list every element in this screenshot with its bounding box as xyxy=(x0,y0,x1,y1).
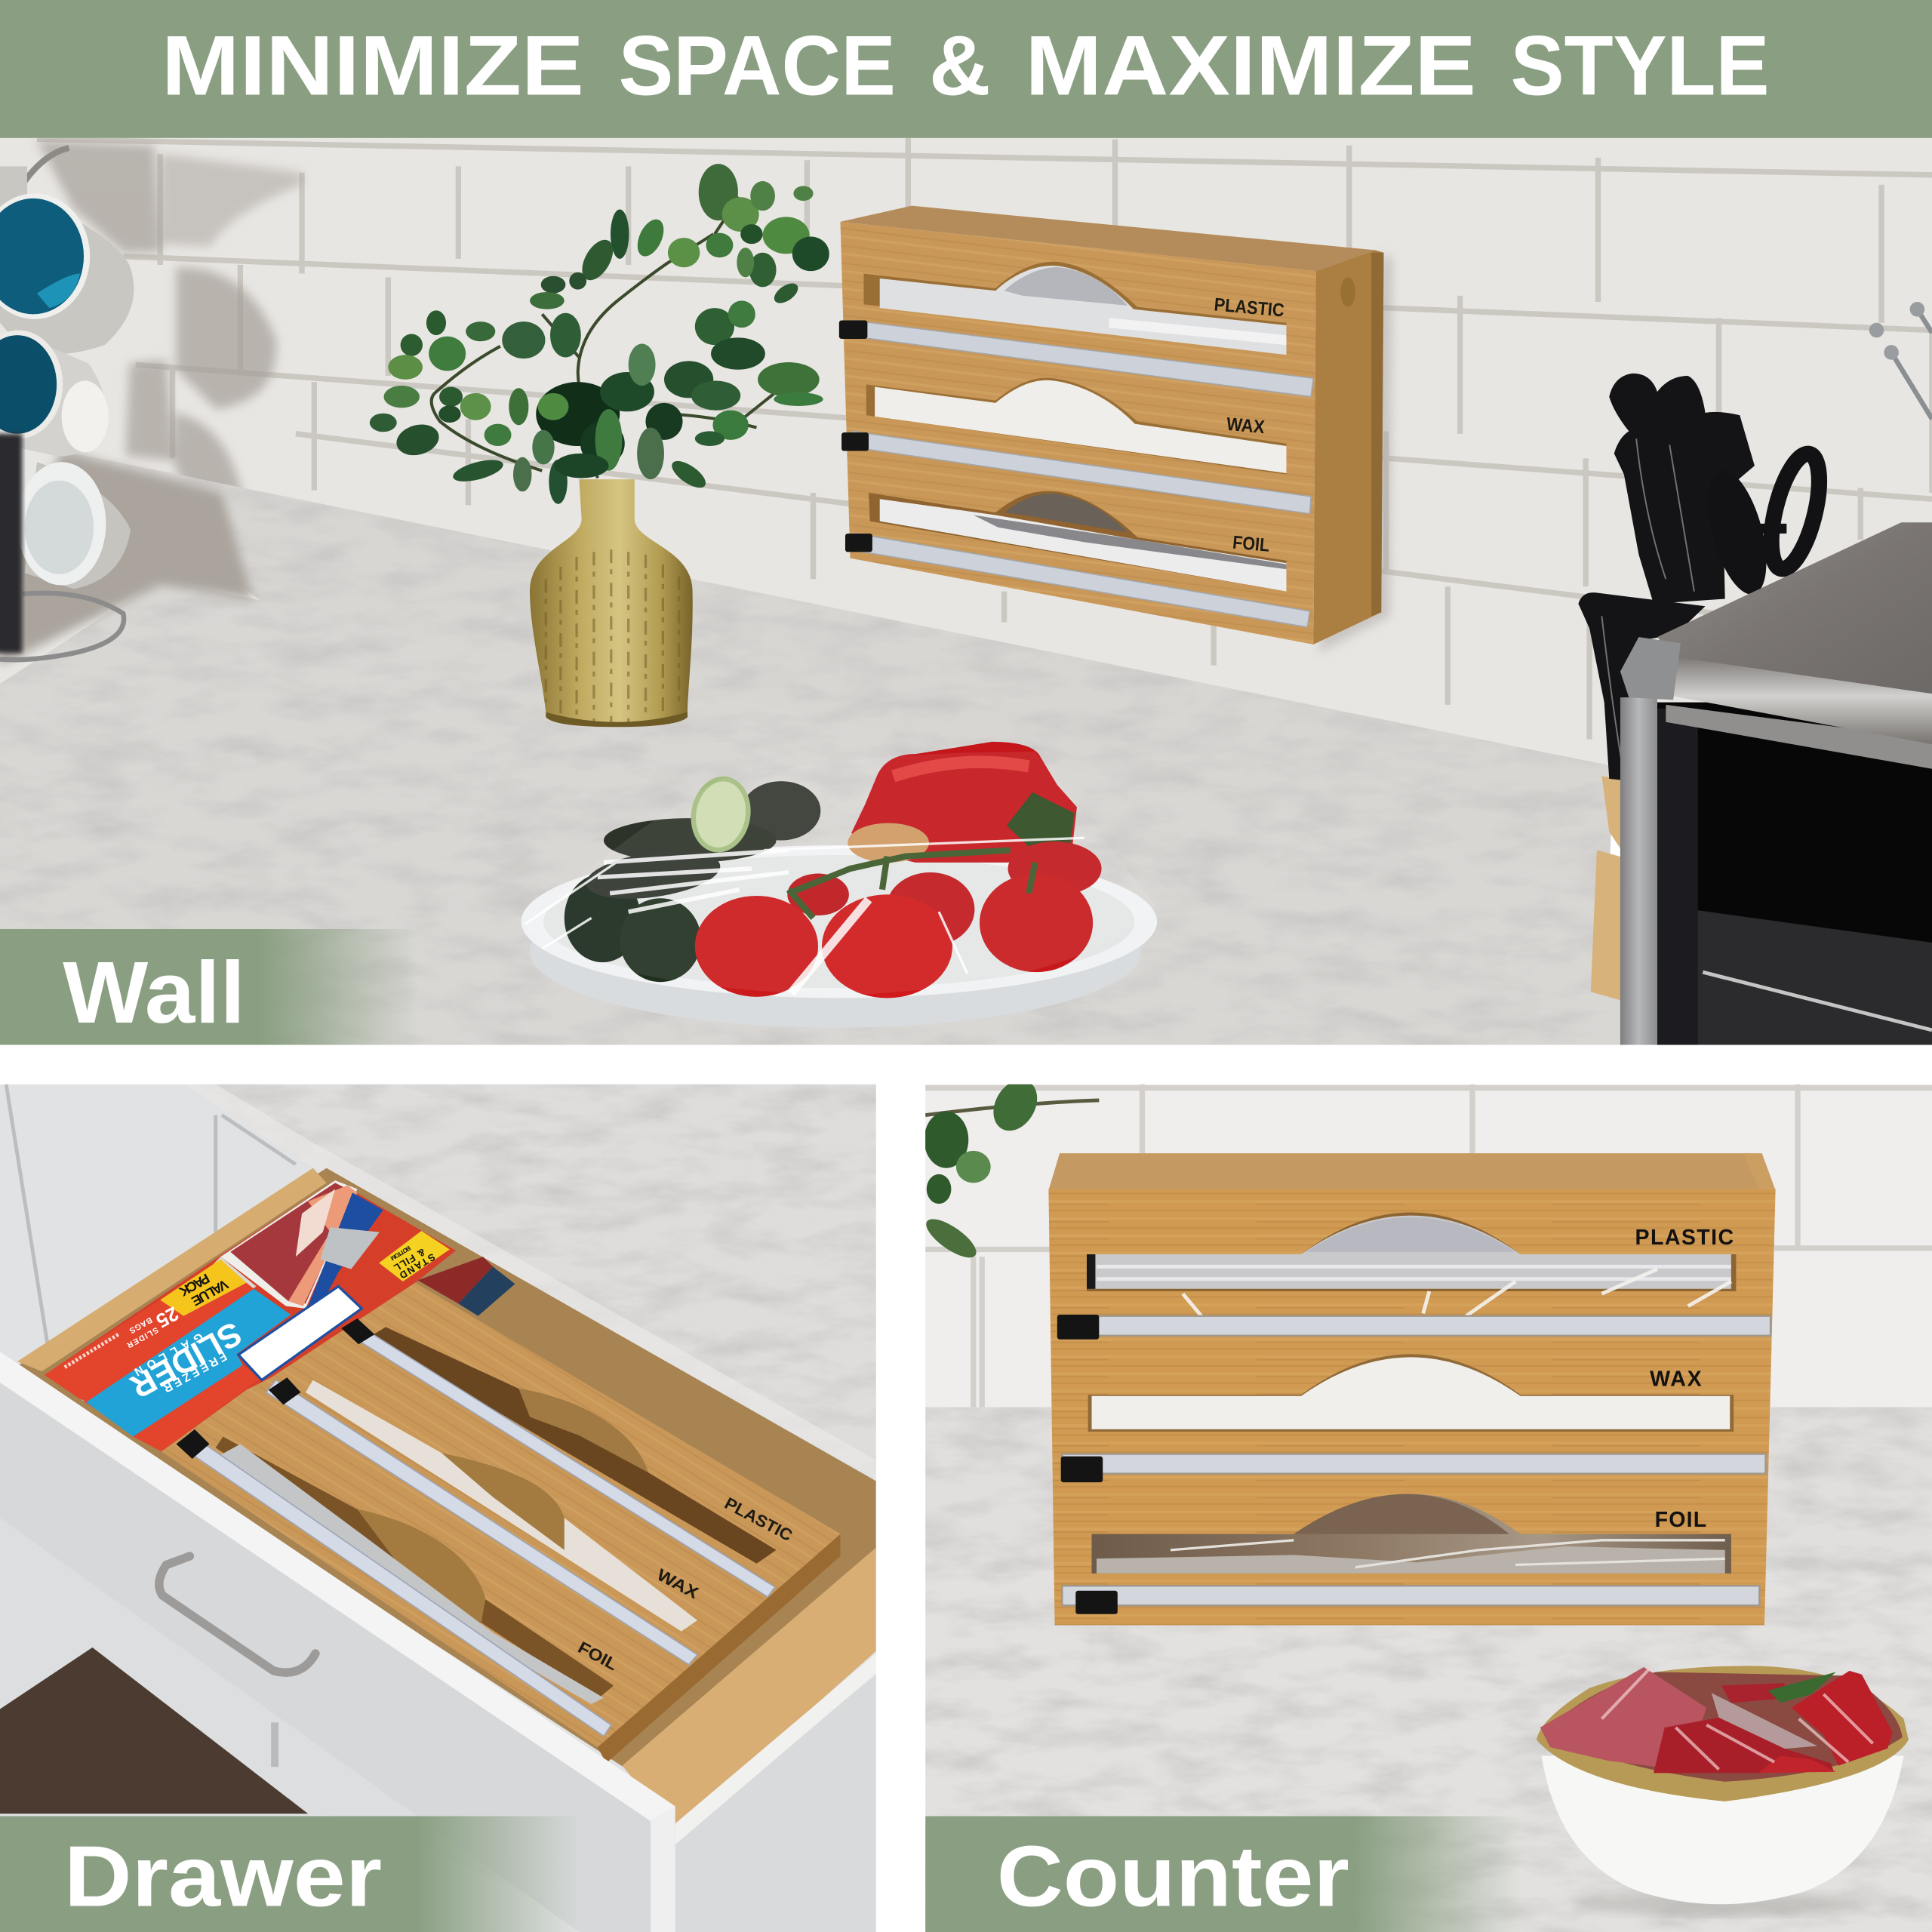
yellow value badge xyxy=(160,1260,247,1316)
wall shadow xyxy=(1318,253,1392,653)
cabinet door lines xyxy=(6,1084,296,1355)
hook xyxy=(22,148,69,185)
lower cabinet handle xyxy=(271,1722,278,1767)
zipper slider xyxy=(320,1227,380,1269)
bowl body xyxy=(1541,1756,1903,1904)
box print: PACK: PACK xyxy=(177,1271,212,1300)
drawer lower side xyxy=(675,1675,876,1932)
mug shadows on wall xyxy=(35,138,305,488)
panel: wall mounted scene xyxy=(0,138,1932,1044)
title: STYLE xyxy=(1511,18,1769,113)
label: FOIL: FOIL xyxy=(1232,533,1270,556)
box print: SLIDER: SLIDER xyxy=(124,1314,248,1405)
strawberries xyxy=(1540,1667,1893,1773)
wall tiles xyxy=(925,1084,1932,1417)
title: MINIMIZE xyxy=(162,18,584,113)
red box face xyxy=(45,1180,456,1451)
plate underside xyxy=(530,875,1141,1028)
white label xyxy=(238,1286,361,1380)
rack rod xyxy=(1703,972,1932,1030)
mug middle xyxy=(0,331,109,456)
mug top xyxy=(0,166,134,355)
plastic wrap opening xyxy=(1087,1213,1736,1316)
plastic slot xyxy=(370,1327,777,1564)
corner block xyxy=(1620,637,1681,700)
red panel lower xyxy=(133,1365,260,1451)
marble countertop xyxy=(925,1571,1932,1932)
banner: Wall xyxy=(0,929,419,1044)
plastic wrap opening xyxy=(863,262,1286,355)
top face xyxy=(1048,1153,1776,1190)
box print: STAND: STAND xyxy=(398,1251,437,1281)
panel: drawer scene xyxy=(0,1084,876,1932)
marble backsplash lip xyxy=(62,451,1614,900)
toaster oven xyxy=(1620,522,1932,1044)
foil opening xyxy=(869,491,1286,592)
title: MAXIMIZE xyxy=(1025,18,1476,113)
lower cabinet xyxy=(0,1518,592,1922)
wax paper opening xyxy=(866,378,1286,475)
top face xyxy=(840,206,1375,271)
slider clips xyxy=(839,320,872,552)
marble backsplash xyxy=(925,1407,1932,1574)
marble countertop xyxy=(185,1084,876,1478)
box print: FREEZER: FREEZER xyxy=(161,1349,229,1395)
dark blurred object xyxy=(0,434,22,653)
box print: GALLON: GALLON xyxy=(132,1330,205,1378)
main body xyxy=(162,1283,840,1747)
label: FOIL: FOIL xyxy=(575,1638,620,1674)
leaves xyxy=(370,164,829,504)
foil slot xyxy=(216,1437,614,1699)
drawer interior xyxy=(18,1168,876,1774)
second box xyxy=(417,1257,515,1316)
banner: Counter xyxy=(925,1817,1521,1932)
bowl inside xyxy=(1548,1672,1903,1782)
plant sprig xyxy=(921,1072,1099,1264)
pepper stem xyxy=(1007,792,1075,853)
plant xyxy=(370,164,829,504)
banner label: Wall xyxy=(63,943,245,1041)
counter dispenser xyxy=(1048,1153,1776,1625)
plastic highlights xyxy=(1601,1667,1873,1769)
marble countertop xyxy=(0,579,1626,1044)
side depth xyxy=(598,1534,840,1763)
label: WAX: WAX xyxy=(654,1565,702,1603)
handle tube xyxy=(1673,657,1932,744)
banner label: Drawer xyxy=(64,1829,382,1925)
banner label: Counter xyxy=(997,1829,1349,1925)
lower knife handles xyxy=(1578,592,1706,781)
cutter bars xyxy=(853,320,1313,627)
wire stand xyxy=(0,593,124,660)
floor xyxy=(0,1647,309,1814)
meat window xyxy=(220,1180,357,1309)
wooden block xyxy=(1591,777,1626,1001)
title banner xyxy=(0,0,1932,138)
plate rim xyxy=(521,845,1157,998)
steel rods at right xyxy=(1869,302,1932,419)
stems xyxy=(432,197,789,478)
steel strip under tube xyxy=(1666,705,1932,769)
label: PLASTIC: PLASTIC xyxy=(1214,295,1285,321)
plate with wrapped vegetables xyxy=(521,742,1157,1028)
box print: BAGS: BAGS xyxy=(128,1315,154,1335)
red band xyxy=(45,1283,254,1402)
slider clips xyxy=(1057,1315,1118,1614)
wall dispenser xyxy=(839,206,1392,653)
front face xyxy=(840,222,1316,645)
box print: SLIDER BAGS: SLIDER xyxy=(125,1325,160,1350)
panel: counter scene xyxy=(921,1072,1932,1932)
highlight stripes xyxy=(1601,438,1694,777)
top plate xyxy=(1657,522,1932,696)
blue panel xyxy=(86,1289,291,1437)
pine drawer side xyxy=(622,1548,876,1829)
mug bottom xyxy=(17,462,131,589)
rear edge xyxy=(1371,253,1383,616)
bowl of strawberries xyxy=(1537,1666,1909,1916)
slider clips xyxy=(176,1318,374,1459)
label: PLASTIC: PLASTIC xyxy=(721,1494,795,1545)
drawer front xyxy=(0,1352,675,1932)
cutter bars xyxy=(1060,1316,1770,1605)
label: WAX: WAX xyxy=(1226,414,1266,438)
small print on band xyxy=(64,1334,118,1367)
label: WAX: WAX xyxy=(1650,1367,1702,1392)
frame post xyxy=(1620,697,1657,1044)
scissors xyxy=(1697,449,1829,601)
dark cucumbers xyxy=(565,772,820,982)
box print: 25: 25 xyxy=(152,1302,183,1333)
ledge shadow xyxy=(0,451,253,666)
box print: VALUE: VALUE xyxy=(189,1277,231,1309)
white stripe xyxy=(82,1257,257,1402)
yellow stand badge xyxy=(379,1231,450,1281)
drawer side rail xyxy=(17,1168,327,1371)
gold vase xyxy=(530,479,693,727)
cutter bars xyxy=(183,1324,775,1736)
cabinet background xyxy=(0,1084,876,1932)
box print: BOTTOM: BOTTOM xyxy=(389,1244,412,1262)
upper knife handles xyxy=(1609,374,1755,604)
lower glass xyxy=(1690,909,1932,1044)
front face xyxy=(1048,1189,1776,1625)
knife block xyxy=(1578,374,1829,1001)
foil opening xyxy=(1092,1494,1731,1574)
drawer dispenser xyxy=(162,1283,840,1763)
side face xyxy=(1313,250,1383,645)
banner: Drawer xyxy=(0,1817,579,1932)
shadow xyxy=(1571,1891,1866,1916)
onion xyxy=(848,823,929,863)
box print: & FILL: & FILL xyxy=(392,1246,427,1274)
box of slider bags xyxy=(45,1180,515,1451)
plate well xyxy=(543,855,1135,988)
mugs on stand xyxy=(0,148,134,660)
loose plastic film xyxy=(1183,1269,1731,1316)
title: & xyxy=(929,18,991,113)
wax paper opening xyxy=(1088,1354,1734,1432)
wax slot xyxy=(306,1380,697,1632)
inner dark frame xyxy=(1657,709,1698,1044)
tomatoes xyxy=(695,841,1102,998)
title: SPACE xyxy=(619,18,896,113)
plastic wrap dome xyxy=(525,752,1155,995)
red pepper xyxy=(851,742,1077,863)
marble edge xyxy=(185,1084,876,1478)
blue zipper strip xyxy=(307,1192,383,1310)
label: PLASTIC: PLASTIC xyxy=(1635,1226,1734,1250)
drawer handle xyxy=(159,1556,315,1672)
mounting hole xyxy=(1340,277,1355,307)
door glass xyxy=(1657,703,1932,1044)
wall tiles xyxy=(0,138,1932,803)
gold rim xyxy=(1537,1666,1909,1801)
label: FOIL: FOIL xyxy=(1655,1508,1706,1532)
